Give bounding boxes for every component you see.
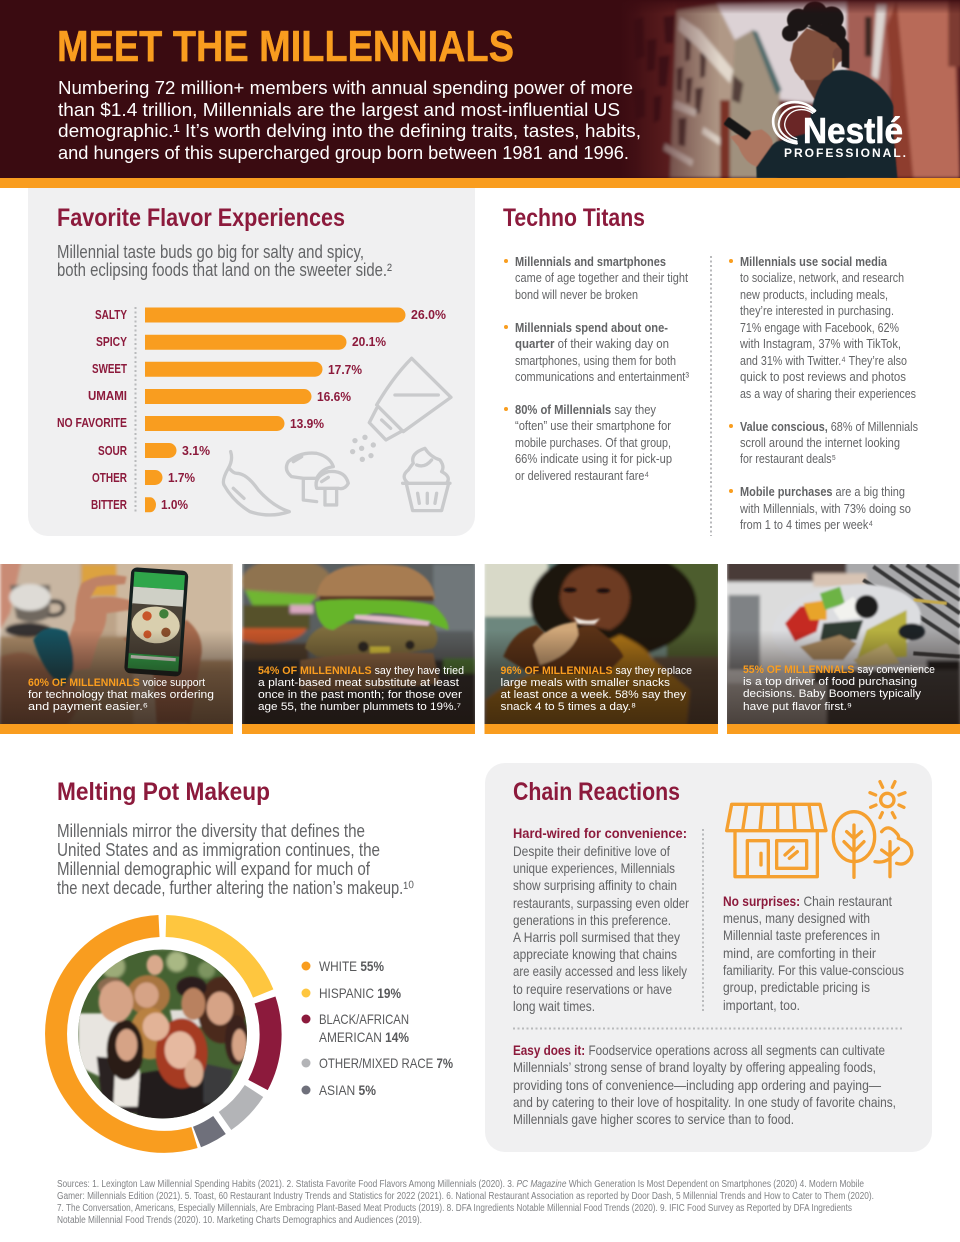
text: hard-wired for convenience: unique experiences, Millennials <box>513 860 675 876</box>
bullet list column one: “often” use their smartphone for <box>515 419 671 433</box>
melting pot paragraph <box>57 821 414 898</box>
hand pointing <box>68 574 129 672</box>
bullet list column two: with Instagram, 37% with TikTok, <box>739 337 901 351</box>
bar chart: flavors: SALTY <box>95 308 128 322</box>
bar chart: flavors: 20.1% <box>352 334 386 349</box>
bullet list column one: Millennials spend about one- <box>515 321 668 335</box>
bullet list column one: 66% indicate using it for pick-up <box>515 452 672 466</box>
header photo: woman with phone in front of buildings <box>620 0 960 178</box>
intro paragraph: than $1.4 trillion, Millennials are the largest and most-influential US <box>58 99 620 120</box>
bullet list column one: bond will never be broken <box>515 288 638 302</box>
neck <box>802 77 825 100</box>
panel: melting pot makeup <box>56 778 453 1142</box>
caption: for technology that makes ordering <box>28 689 214 701</box>
text: hard-wired for convenience: to require reservations or have <box>513 981 672 997</box>
photo card: plant-based burger <box>242 558 477 734</box>
text: hard-wired for convenience: appreciate knowing that chains <box>513 946 677 962</box>
bar chart: flavors: SWEET <box>92 362 127 376</box>
text: no surprises: familiarity. For this value-conscious <box>723 962 904 978</box>
bullet list column one: 80% of Millennials say they <box>515 403 657 417</box>
bullet list column two <box>729 255 918 532</box>
legend: AMERICAN 14% <box>319 1029 409 1045</box>
text: easy does it: Millennials gave higher scores to service than to food. <box>513 1111 794 1127</box>
logo: Nestle Professional: PROFESSIONAL. <box>784 146 906 160</box>
bar chart: flavors: 26.0% <box>411 307 446 322</box>
melting pot paragraph: Millennials mirror the diversity that defines the <box>57 821 365 841</box>
bar chart: flavors: 1.0% <box>161 497 188 512</box>
bullet list column one <box>504 255 689 483</box>
melting pot paragraph: Millennial demographic will expand for much of <box>57 859 371 879</box>
bullet list column two: 71% engage with Facebook, 62% <box>740 321 899 335</box>
bullet list column two: new products, including meals, <box>740 288 888 302</box>
panel: favorite flavor experiences <box>28 188 475 536</box>
bullet list column two: scroll around the internet looking <box>740 436 900 450</box>
bullet list column one: smartphones, using them for both <box>515 354 676 368</box>
text: hard-wired for convenience: long wait times. <box>513 998 595 1014</box>
legend <box>302 958 453 1098</box>
text: hard-wired for convenience: restaurants, surpassing even older <box>513 895 689 911</box>
caption: 54% OF MILLENNIALS say they have tried <box>258 665 464 677</box>
logo: Nestle Professional: Nestlé <box>803 110 903 151</box>
legend: BLACK/AFRICAN <box>319 1011 409 1027</box>
caption: age 55, the number plummets to 19%.⁷ <box>258 701 461 713</box>
bar chart: flavors: 3.1% <box>182 443 210 458</box>
bar chart: flavors: OTHER <box>92 471 127 485</box>
flavor intro text: Millennial taste buds go big for salty and spicy, <box>57 242 364 262</box>
logo: Nestle Professional <box>773 102 906 160</box>
bar chart: flavors: 17.7% <box>328 362 362 377</box>
caption: have put flavor first.⁹ <box>743 701 852 713</box>
icons: shaker, chili, mushrooms, cupcake <box>223 358 451 515</box>
legend: HISPANIC 19% <box>319 985 401 1001</box>
caption: decisions. Baby Boomers typically <box>743 688 922 700</box>
donut chart: demographics <box>56 926 271 1142</box>
text: no surprises: mind, are comforting in their <box>723 945 876 961</box>
heading: techno titans: Techno Titans <box>503 204 645 232</box>
caption: 55% OF MILLENNIALS say convenience <box>743 664 935 676</box>
intro paragraph: demographic.¹ It’s worth delving into the defining traits, tastes, habits, <box>58 120 641 141</box>
bullet list column two: to socialize, network, and research <box>740 271 904 285</box>
bullet list column two: for restaurant deals⁵ <box>740 452 836 466</box>
bar chart: flavors: BITTER <box>91 498 127 512</box>
text: hard-wired for convenience <box>513 825 689 1014</box>
bullet list column two: quick to post reviews and photos <box>740 370 906 384</box>
text: no surprises: No surprises: Chain restaurant <box>723 893 892 909</box>
legend: WHITE 55% <box>319 958 384 974</box>
heading: flavor: Favorite Flavor Experiences <box>57 204 345 232</box>
bar chart: flavors: UMAMI <box>88 389 127 403</box>
heading: chain reactions: Chain Reactions <box>513 778 680 806</box>
panel: techno titans <box>503 204 918 536</box>
text: hard-wired for convenience: generations in this preference. <box>513 912 671 928</box>
bullet list column two: with Millennials, with 73% doing so <box>739 502 911 516</box>
photo card: woman snacking <box>484 548 720 734</box>
text: easy does it: and by catering to their love of hospitality. In one study of favorite chains, <box>513 1094 896 1110</box>
legend: OTHER/MIXED RACE 7% <box>319 1055 453 1071</box>
text: no surprises: important, too. <box>723 997 800 1013</box>
photo card: phone ordering <box>0 560 233 734</box>
bullet list column one: came of age together and their tight <box>515 271 688 285</box>
legend: ASIAN 5% <box>319 1082 376 1098</box>
text: easy does it: Easy does it: Foodservice operations across all segments can cultivate <box>513 1042 885 1058</box>
bullet list column one: quarter of their waking day on <box>515 337 669 351</box>
group photo in donut center <box>77 948 250 1122</box>
bullet list column one: communications and entertainment³ <box>515 370 689 384</box>
text: easy does it: providing tons of convenience—including app ordering and paying— <box>513 1077 881 1093</box>
text: no surprises: menus, many designed with <box>723 910 870 926</box>
text: no surprises: group, predictable pricing is <box>723 979 870 995</box>
flavor intro text <box>57 242 392 280</box>
caption: 96% OF MILLENNIALS say they replace <box>500 665 692 677</box>
bullet list column one: mobile purchases. Of that group, <box>515 436 671 450</box>
melting pot paragraph: United States and as immigration continues, the <box>57 840 380 860</box>
bullet list column two: they’re interested in purchasing. <box>740 304 894 318</box>
caption: snack 4 to 5 times a day.⁸ <box>500 701 636 713</box>
text: easy does it <box>513 1042 896 1127</box>
bar chart: flavors: 13.9% <box>290 416 324 431</box>
caption: 60% OF MILLENNIALS voice support <box>28 677 205 689</box>
photo card: salad bowl convenience <box>727 560 960 734</box>
hoodie <box>756 70 897 178</box>
header banner <box>0 0 960 188</box>
flavor intro text: both eclipsing foods that land on the sweeter side.² <box>57 260 392 280</box>
bullet list column two: and 31% with Twitter.⁴ They’re also <box>740 354 907 368</box>
caption <box>500 665 692 713</box>
text: hard-wired for convenience: A Harris poll surmised that they <box>513 929 680 945</box>
caption: once in the past month; for those over <box>258 689 462 701</box>
bar chart: flavors: 16.6% <box>317 389 351 404</box>
intro paragraph <box>58 77 641 163</box>
panel: chain reactions <box>485 763 932 1152</box>
caption <box>28 677 214 713</box>
bar chart: flavors: SPICY <box>96 335 128 349</box>
bullet list column two: Value conscious, 68% of Millennials <box>740 420 918 434</box>
bullet list column one: or delivered restaurant fare⁴ <box>515 469 649 483</box>
bar chart: flavors: NO FAVORITE <box>57 416 127 430</box>
caption: at least once a week. 58% say they <box>500 689 687 701</box>
text: hard-wired for convenience: Despite their definitive love of <box>513 843 670 859</box>
bullet list column two: as a way of sharing their experiences <box>740 387 916 401</box>
bar chart: flavors: SOUR <box>98 444 127 458</box>
sources footnote: Sources: 1. Lexington Law Millennial Spending Habits (2021). 2. Statista Favorite Food Flavors Among Millennials (2020). 3. PC Magazine Which Generation Is Most Dependent on Smartphones (2020) 4. Modern Mobile <box>57 1179 864 1190</box>
text: no surprises: Millennial taste preferences in <box>723 927 880 943</box>
sources footnote: Notable Millennial Food Trends (2020). 10. Marketing Charts Demographics and Audiences (2019). <box>57 1215 422 1226</box>
sources footnote <box>57 1179 874 1226</box>
heading: melting pot: Melting Pot Makeup <box>57 778 270 806</box>
bullet list column two: Mobile purchases are a big thing <box>740 485 905 499</box>
caption: and payment easier.⁶ <box>28 701 148 713</box>
caption: large meals with smaller snacks <box>500 677 671 689</box>
bullet list column two: from 1 to 4 times per week⁴ <box>740 518 873 532</box>
melting pot paragraph: the next decade, further altering the nation’s makeup.¹⁰ <box>57 878 414 898</box>
text: hard-wired for convenience: Hard-wired for convenience: <box>513 825 687 841</box>
caption: is a top driver of food purchasing <box>743 676 917 688</box>
intro paragraph: Numbering 72 million+ members with annual spending power of more <box>58 77 633 98</box>
text: easy does it: Millennials’ strong sense of brand loyalty by offering appealing foods, <box>513 1059 876 1075</box>
text: hard-wired for convenience: are easily accessed and less likely <box>513 963 687 979</box>
caption: a plant-based meat substitute at least <box>258 677 459 689</box>
bar chart: flavors <box>57 307 446 513</box>
title: MEET THE MILLENNIALS <box>57 22 514 71</box>
icon: storefront, trees and sun <box>727 782 912 877</box>
text: no surprises <box>723 893 904 1013</box>
caption <box>258 665 464 713</box>
bullet list column one: Millennials and smartphones <box>515 255 666 269</box>
bar chart: flavors: 1.7% <box>168 470 195 485</box>
intro paragraph: and hungers of this supercharged group born between 1981 and 1996. <box>58 142 629 163</box>
text: hard-wired for convenience: show surprising affinity to chain <box>513 877 677 893</box>
bullet list column two: Millennials use social media <box>740 255 888 269</box>
caption <box>743 664 935 713</box>
